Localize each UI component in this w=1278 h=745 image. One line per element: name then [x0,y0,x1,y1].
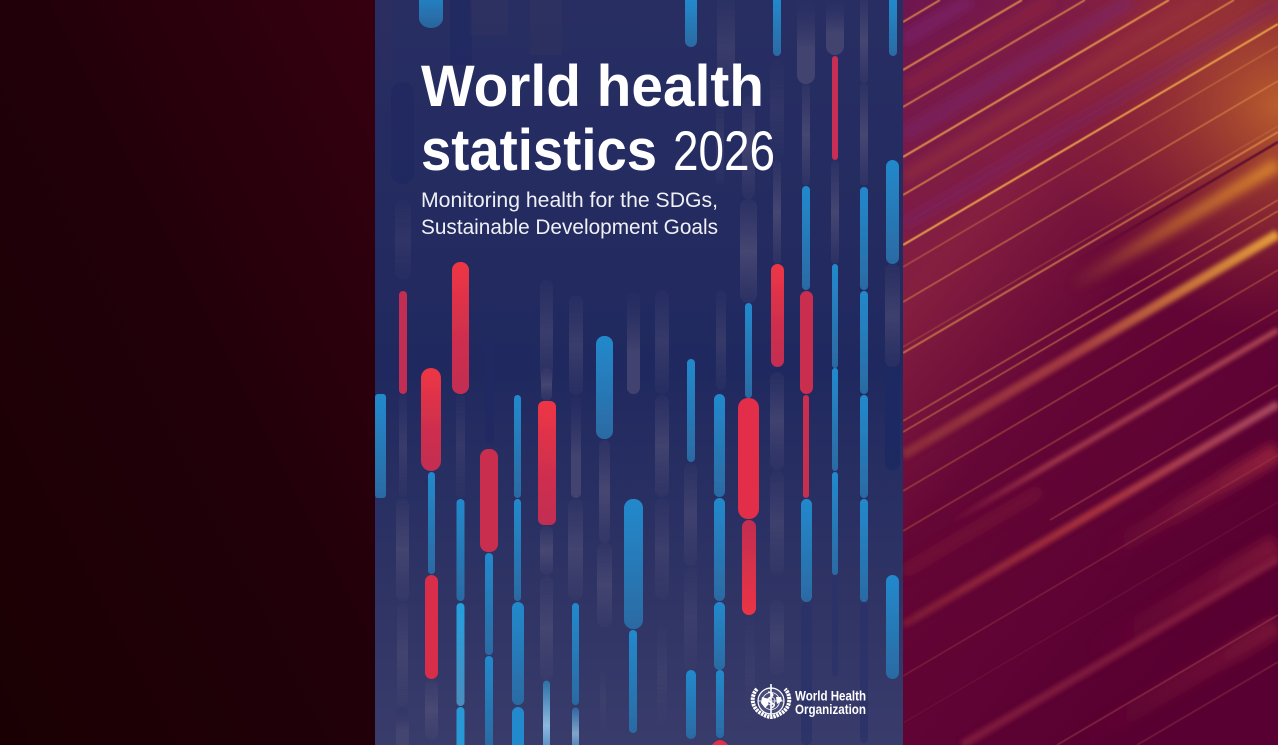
subtitle [421,189,718,239]
red bars [399,56,838,745]
background grey bars [380,0,900,745]
WHO wordmark [795,688,866,717]
panel: left dark background [0,0,376,745]
title: statistics [421,118,657,183]
icon: WHO emblem [753,684,789,717]
subtitle: Sustainable Development Goals [421,216,718,239]
title [421,54,775,183]
panel: right diagonal light streak background [903,0,1278,745]
WHO wordmark: World Health [795,688,866,704]
panel: report cover [375,0,903,745]
subtitle: Monitoring health for the SDGs, [421,189,718,212]
title: World health [421,54,764,119]
title: 2026 [673,119,775,182]
blue bars [375,0,899,745]
WHO wordmark: Organization [795,701,866,717]
